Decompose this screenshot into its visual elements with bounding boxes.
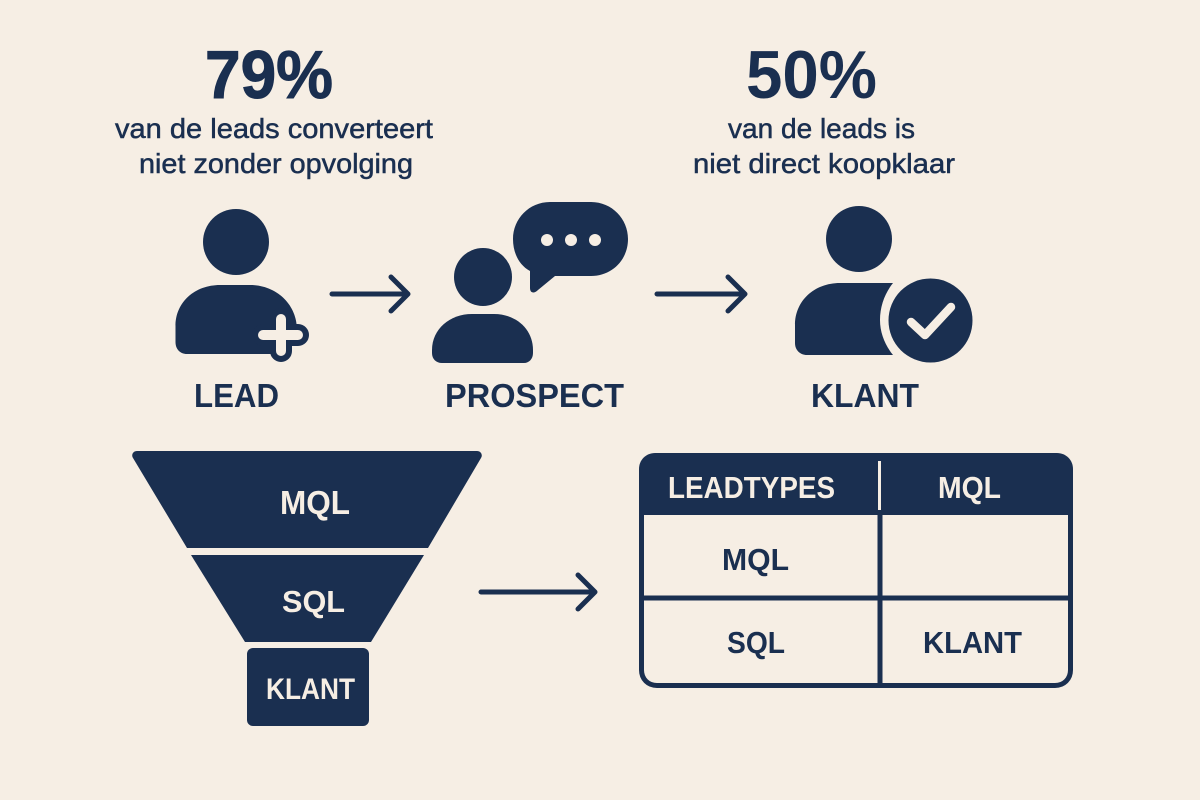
table cell: SQL: SQL — [727, 625, 785, 660]
text: 50% description — [693, 113, 955, 179]
arrow: lead to prospect — [332, 277, 408, 311]
table: leadtypes — [639, 453, 1073, 686]
icon: prospect person with speech bubble — [432, 202, 628, 363]
heading: 50%: 50% — [746, 37, 877, 113]
funnel stage: SQL — [191, 555, 424, 642]
heading: 79%: 79% — [205, 37, 333, 113]
funnel stage: SQL: SQL — [282, 584, 345, 619]
text: 79% description: van de leads converteert — [115, 113, 433, 144]
label: LEAD: LEAD — [194, 377, 279, 414]
statistic: 79 percent — [115, 37, 433, 179]
table cell: KLANT: KLANT — [923, 625, 1022, 660]
icon: klant person with check mark — [795, 206, 972, 362]
table header: LEADTYPES — [668, 470, 835, 505]
icon: lead person with plus — [176, 209, 298, 354]
table header: MQL — [938, 470, 1001, 505]
text: 50% description: van de leads is — [728, 113, 915, 144]
table cell: MQL: MQL — [722, 542, 789, 577]
text: 79% description — [115, 113, 433, 179]
funnel stage: KLANT — [247, 648, 369, 726]
text: 50% description: niet direct koopklaar — [693, 148, 955, 179]
statistic: 50 percent — [693, 37, 955, 179]
label: KLANT: KLANT — [811, 377, 919, 414]
text: 79% description: niet zonder opvolging — [139, 148, 413, 179]
funnel stage: MQL — [132, 451, 482, 548]
table grid — [641, 514, 1071, 686]
funnel stage: MQL: MQL — [280, 484, 350, 521]
table header — [639, 453, 1073, 515]
arrow: prospect to klant — [657, 277, 745, 311]
funnel stage: KLANT: KLANT — [266, 673, 355, 706]
arrow: funnel to table — [481, 575, 595, 609]
chart: funnel — [132, 451, 482, 726]
label: PROSPECT: PROSPECT — [445, 377, 624, 414]
